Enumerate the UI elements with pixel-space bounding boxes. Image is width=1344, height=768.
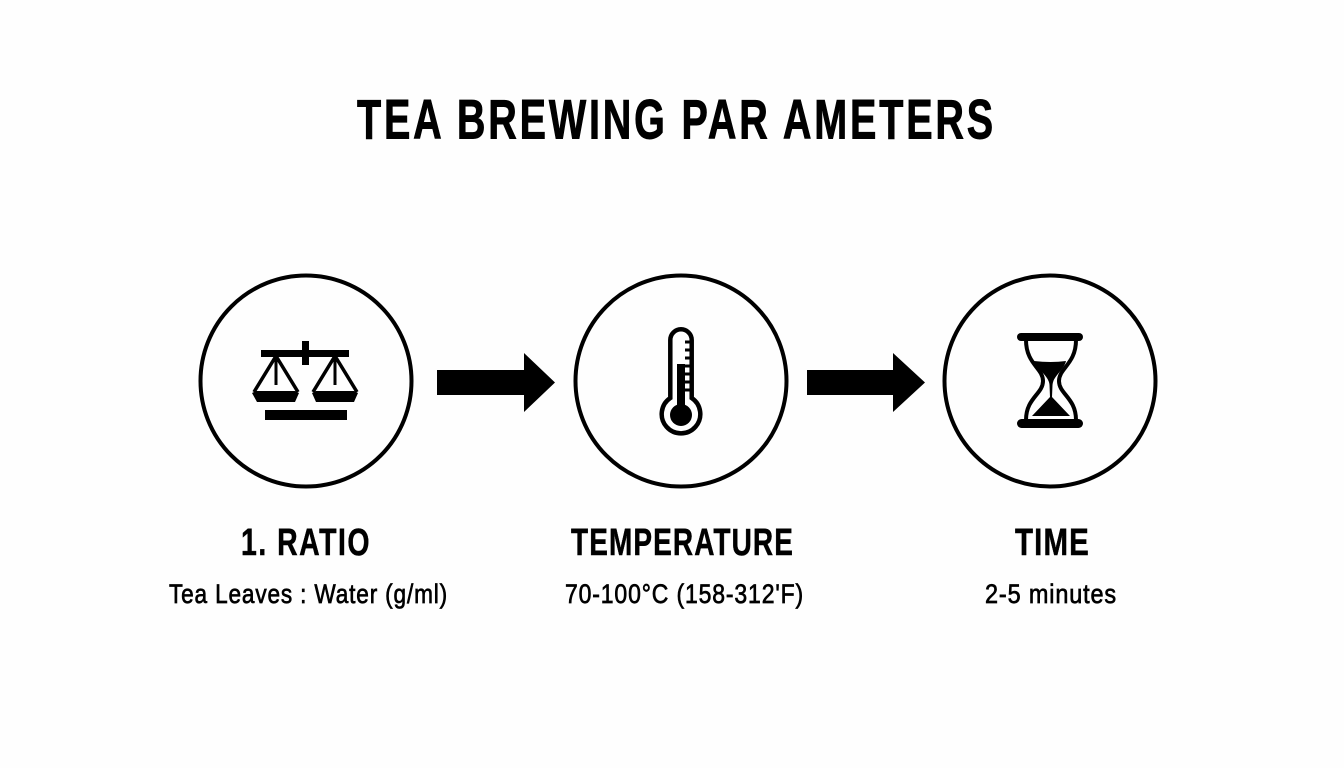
panel: ratio bbox=[169, 276, 448, 609]
ratio heading: 1. RATIO bbox=[241, 522, 371, 564]
temperature description: 70-100°C (158-312'F) bbox=[565, 579, 804, 609]
icon: balance scale bbox=[252, 341, 358, 420]
time circle bbox=[944, 276, 1156, 486]
time description: 2-5 minutes bbox=[985, 579, 1117, 609]
temperature heading: TEMPERATURE bbox=[571, 522, 794, 564]
time heading: TIME bbox=[1015, 522, 1090, 564]
icon: hourglass bbox=[1017, 333, 1083, 428]
panel: time bbox=[944, 276, 1156, 609]
ratio description: Tea Leaves : Water (g/ml) bbox=[169, 579, 448, 609]
icon: thermometer bbox=[662, 329, 700, 433]
ratio circle bbox=[200, 276, 412, 486]
title: TEA BREWING PAR AMETERS bbox=[357, 88, 996, 150]
temperature circle bbox=[576, 276, 786, 486]
arrow: ratio to temperature bbox=[437, 353, 555, 412]
arrow: temperature to time bbox=[807, 353, 925, 412]
panel: temperature bbox=[565, 276, 804, 609]
